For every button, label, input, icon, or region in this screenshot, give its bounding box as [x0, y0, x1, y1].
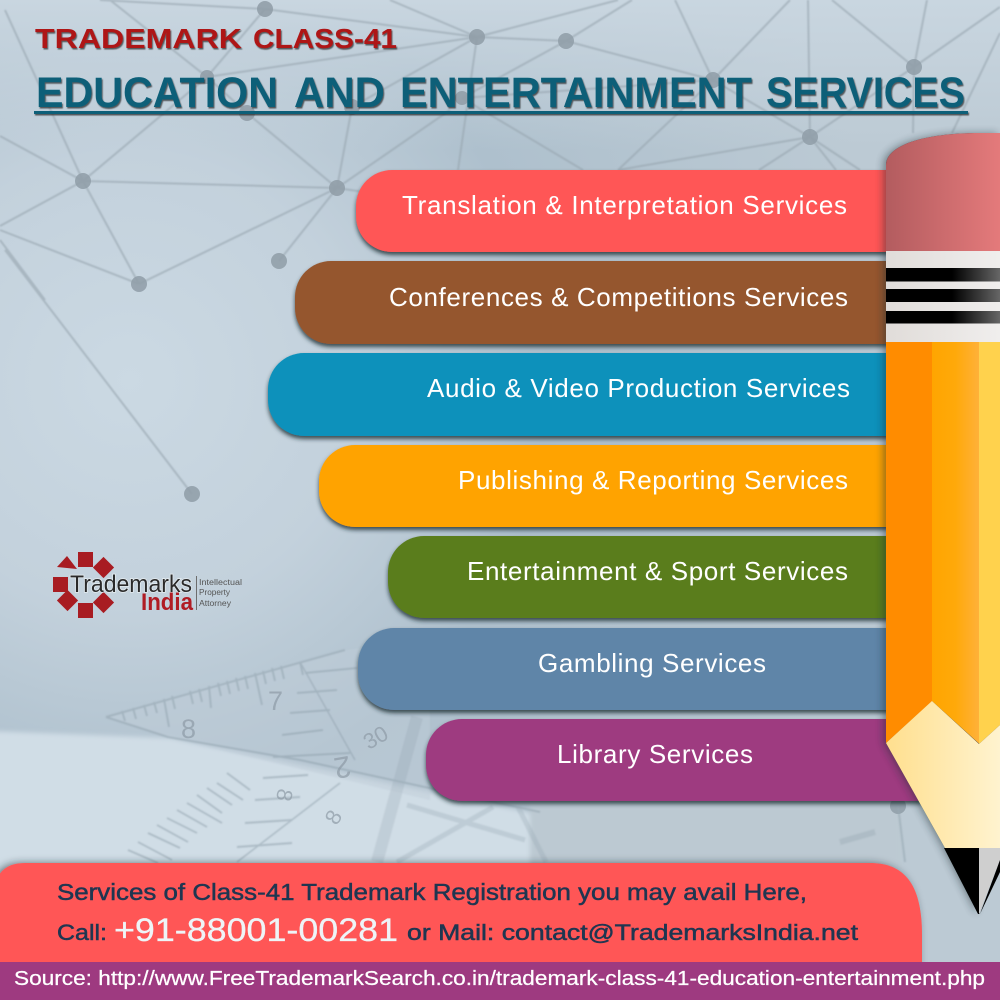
panel: conferences: [295, 261, 935, 344]
ruler numerals: 2: [331, 749, 353, 784]
pencil metal band: [886, 251, 1000, 342]
panel: library: [426, 719, 966, 801]
pencil eraser: [886, 133, 1000, 251]
contact line 2: Call:: [57, 920, 107, 945]
icon: pencil: [886, 133, 1000, 914]
network nodes: [75, 1, 922, 814]
panel: audio video: [268, 353, 938, 436]
ruler numerals: [181, 686, 392, 829]
panel: conferences: Conferences & Competitions Services: [389, 282, 848, 312]
ruler numerals: 30: [359, 721, 392, 754]
contact line 2: or Mail: contact@TrademarksIndia.net: [407, 920, 858, 945]
network pattern: [0, 0, 1000, 494]
panel: entertainment: [388, 536, 938, 618]
title: education and entertainment services: ENTERTAINMENT: [400, 69, 752, 117]
panel: gambling: [358, 628, 938, 710]
source bar: [0, 962, 1000, 1000]
pencil wood tip: [886, 701, 1000, 848]
logo: Trademarks India: Intellectual: [199, 578, 242, 587]
contact line 2: [57, 912, 858, 948]
ruler numerals: 8: [320, 806, 347, 829]
panel: translation: [356, 170, 936, 252]
panel: translation: Translation & Interpretation Services: [402, 190, 847, 220]
title: education and entertainment services: SERVICES: [766, 69, 965, 117]
title: education and entertainment services: EDUCATION: [36, 69, 278, 117]
title: trademark class: TRADEMARK: [35, 23, 242, 54]
panel: contact: [0, 863, 922, 975]
source bar: Source: http://www.FreeTrademarkSearch.co.in/trademark-class-41-education-entertainment.php: [14, 968, 985, 990]
ruler numerals: 8: [181, 714, 196, 744]
ruler numerals: 8: [271, 787, 298, 803]
ruler numerals: 7: [268, 686, 283, 716]
panel: library: Library Services: [557, 739, 753, 769]
title: education and entertainment services: [34, 69, 968, 117]
panel: publishing: Publishing & Reporting Services: [458, 465, 848, 495]
title: trademark class: [35, 23, 397, 54]
pencil lead: [944, 848, 1000, 914]
panel: audio video: Audio & Video Production Services: [427, 373, 850, 403]
logo: Trademarks India: Attorney: [199, 599, 231, 608]
logo: Trademarks India: Trademarks: [70, 571, 192, 598]
title: education and entertainment services: AND: [294, 69, 385, 117]
panel: entertainment: Entertainment & Sport Services: [467, 556, 848, 586]
title: trademark class: CLASS-41: [253, 23, 397, 54]
contact line 2: +91-88001-00281: [114, 912, 398, 948]
panel: gambling: Gambling Services: [538, 648, 766, 678]
contact line 1: Services of Class-41 Trademark Registration you may avail Here,: [57, 879, 807, 905]
logo: Trademarks India: India: [141, 589, 194, 616]
logo: Trademarks India: [53, 552, 242, 618]
panel: publishing: [319, 445, 939, 527]
logo: Trademarks India: Property: [199, 588, 230, 597]
ruler pattern: [106, 640, 905, 863]
pencil body: [886, 342, 1000, 744]
